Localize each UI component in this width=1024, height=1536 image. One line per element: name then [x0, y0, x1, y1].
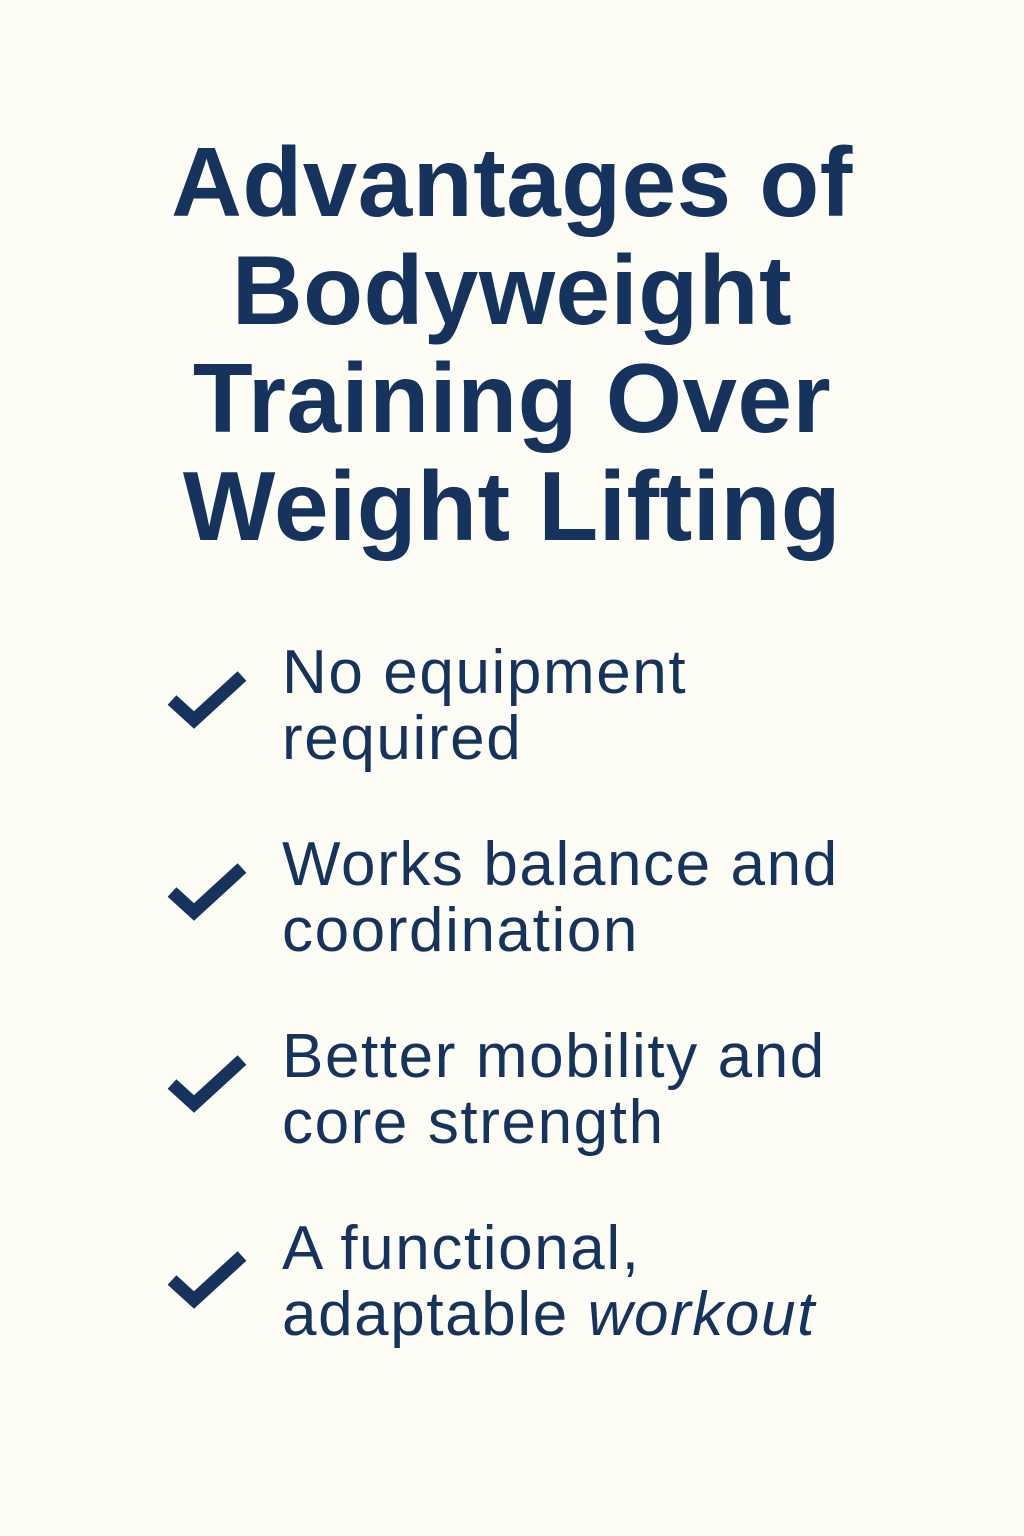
title: Advantages of — [171, 127, 853, 237]
text — [282, 1214, 816, 1349]
text: coordination — [282, 896, 639, 965]
icon: check — [168, 1251, 246, 1309]
item: balance — [168, 830, 839, 965]
text: A functional, — [282, 1214, 641, 1283]
item: functional — [168, 1214, 816, 1349]
icon: check — [168, 671, 246, 729]
text — [282, 638, 687, 773]
icon: check — [168, 1055, 246, 1113]
title — [171, 127, 853, 561]
title: Weight Lifting — [183, 451, 841, 561]
item: mobility — [168, 1022, 826, 1157]
text: Works balance and — [282, 830, 839, 899]
text: required — [282, 704, 522, 773]
icon: check — [168, 863, 246, 921]
text: Better mobility and — [282, 1022, 826, 1091]
text — [282, 1022, 826, 1157]
item: no equipment — [168, 638, 687, 773]
text: adaptable workout — [282, 1280, 816, 1349]
text: No equipment — [282, 638, 687, 707]
title: Training Over — [193, 343, 831, 453]
text: core strength — [282, 1088, 665, 1157]
text — [282, 830, 839, 965]
title: Bodyweight — [232, 235, 792, 345]
